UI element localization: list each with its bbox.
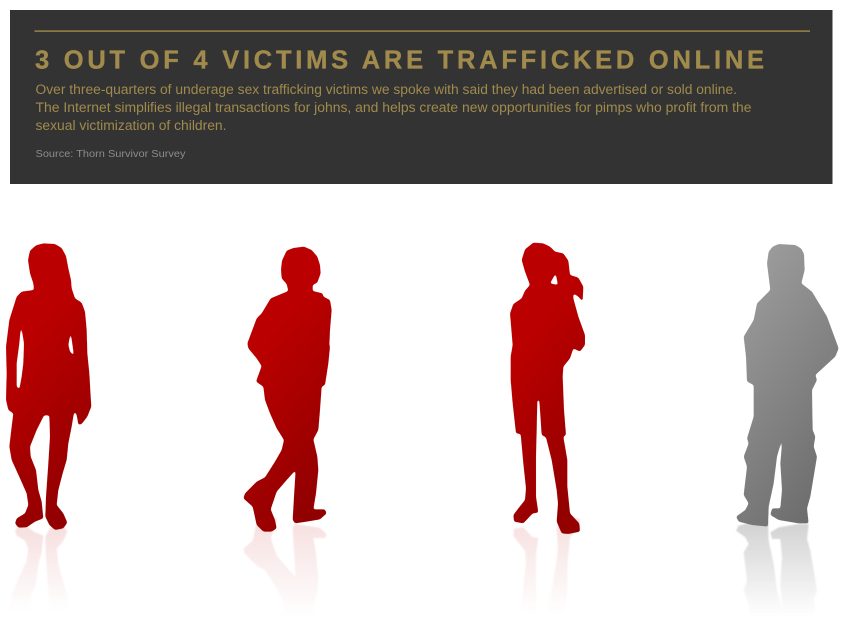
figure 4: non-trafficked victim silhouette (grey) bbox=[736, 244, 839, 617]
figure 1: trafficked victim silhouette (red) bbox=[6, 243, 91, 611]
reflection of figure 3 bbox=[513, 517, 580, 614]
heading: 3 OUT OF 4 VICTIMS ARE TRAFFICKED ONLINE bbox=[35, 46, 764, 74]
figure 3: trafficked victim silhouette (red) bbox=[510, 243, 585, 614]
text block: description: sexual victimization of children. bbox=[36, 118, 227, 133]
panel: headline banner bbox=[10, 10, 833, 184]
text block: description: The Internet simplifies illegal transactions for johns, and helps create new opportunities for pimps who profit from the bbox=[36, 100, 752, 115]
text block: description bbox=[36, 82, 752, 133]
reflection of figure 1 bbox=[9, 524, 69, 611]
reflection of figure 4 bbox=[736, 521, 817, 617]
text block: description: Over three-quarters of underage sex trafficking victims we spoke with said they had been advertised or sold online. bbox=[36, 82, 737, 97]
reflection of figure 2 bbox=[243, 516, 327, 617]
figure 2: trafficked victim silhouette (red) bbox=[243, 247, 332, 617]
source note: Source: Thorn Survivor Survey bbox=[36, 149, 186, 160]
